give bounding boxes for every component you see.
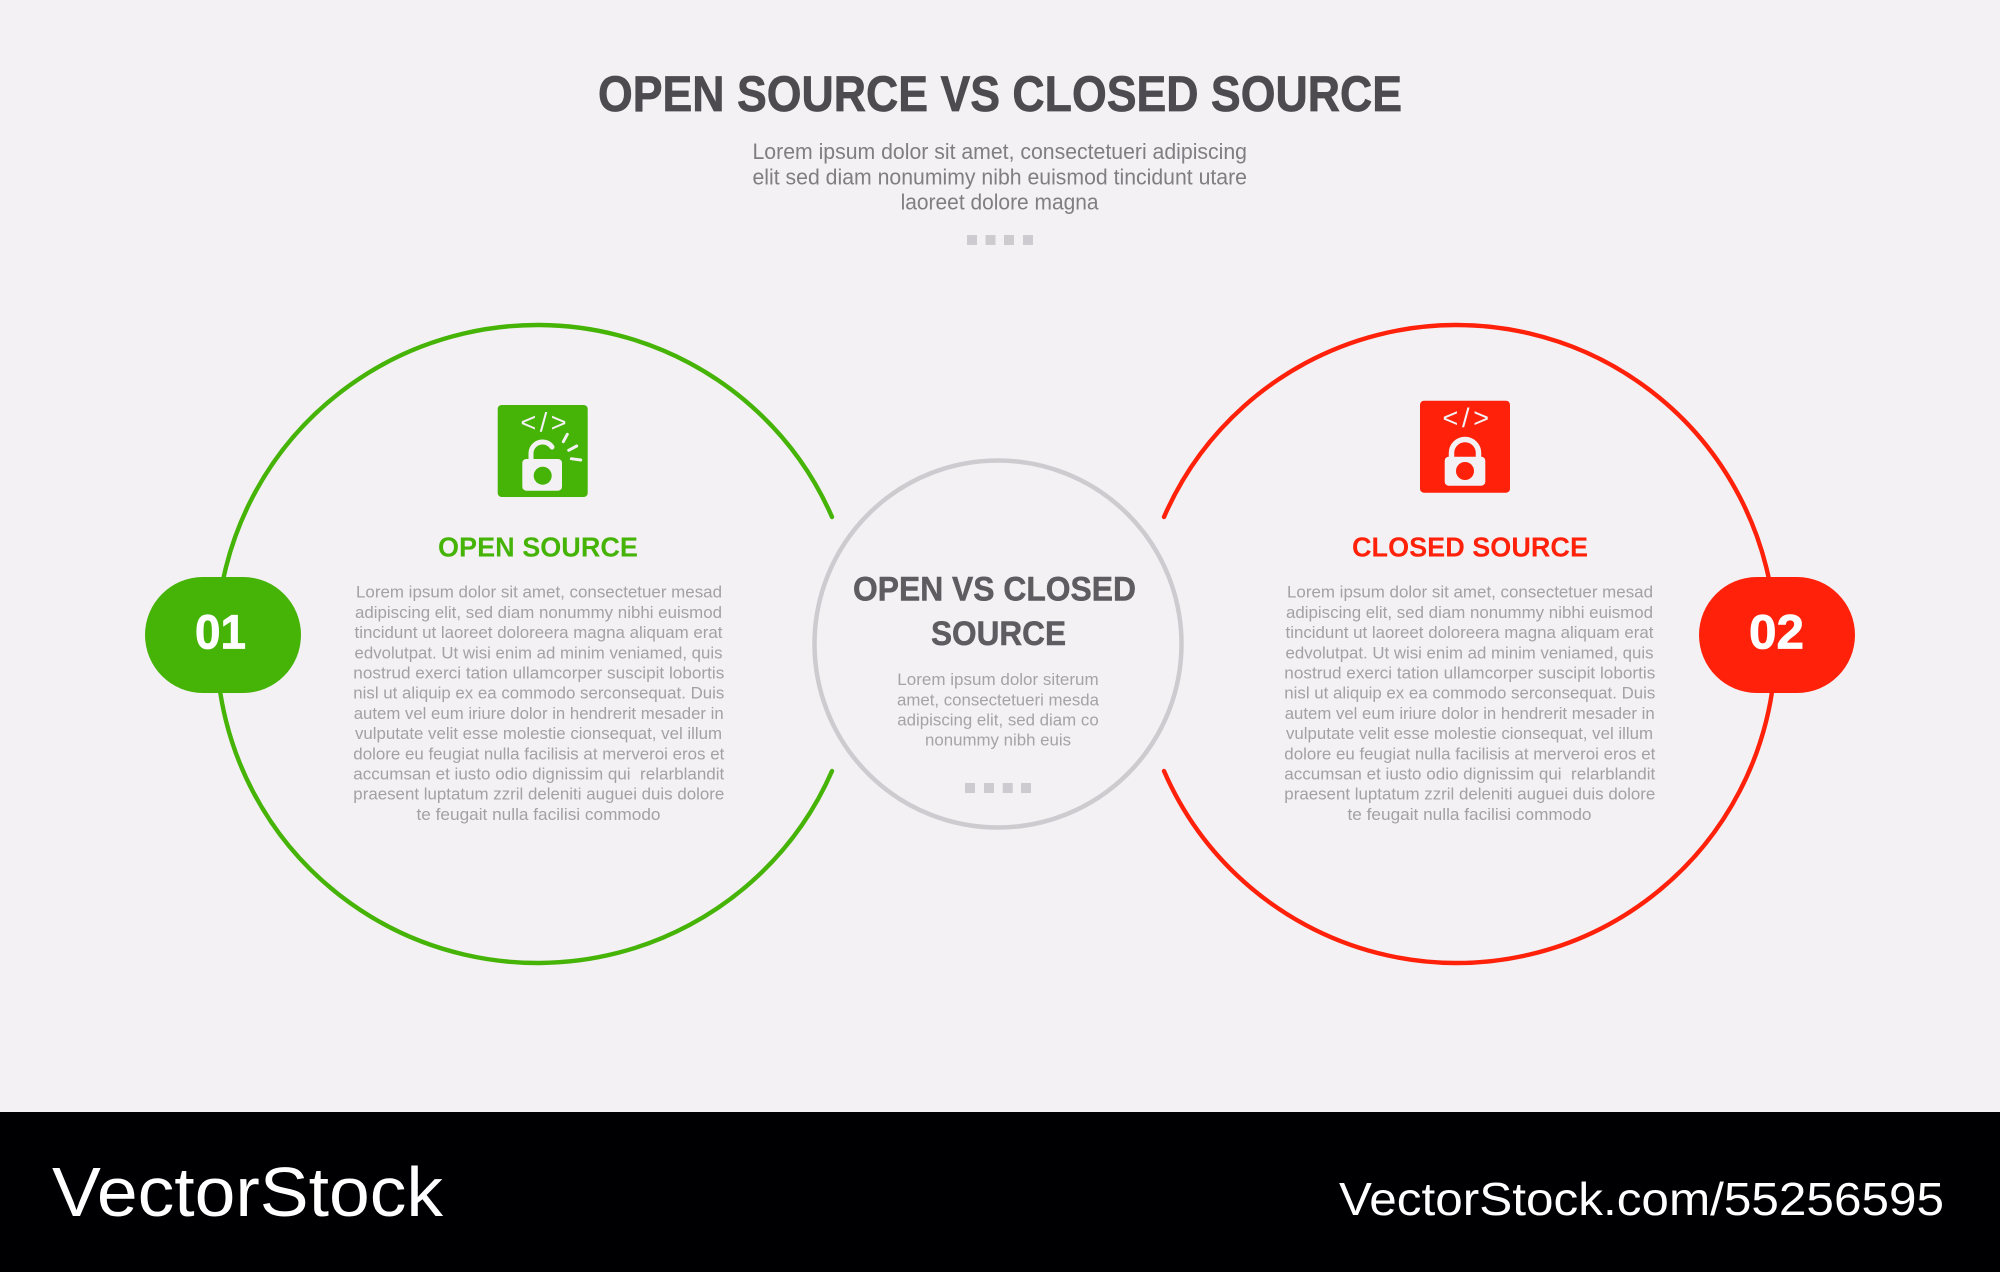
center heading: SOURCE	[931, 615, 1066, 653]
subtitle text block: laoreet dolore magna	[901, 190, 1099, 214]
closed source body text: te feugait nulla facilisi commodo	[1348, 805, 1592, 824]
icon: code with closed padlock: </>	[1442, 403, 1489, 433]
open source body text: dolore eu feugiat nulla facilisis at merveroi eros et	[353, 744, 725, 763]
panel: center comparison	[814, 460, 1182, 828]
closed source heading: CLOSED SOURCE	[1352, 532, 1588, 562]
open source body text: vulputate velit esse molestie cionsequat, vel illum	[355, 724, 722, 743]
closed source body text: praesent luptatum zzril deleniti auguei duis dolore	[1284, 785, 1655, 804]
panel: open source	[145, 325, 832, 963]
subtitle text block: Lorem ipsum dolor sit amet, consectetueri adipiscing	[752, 139, 1247, 164]
center heading: OPEN VS CLOSED	[853, 570, 1136, 608]
open source body text: edvolutpat. Ut wisi enim ad minim veniamed, quis	[354, 643, 722, 662]
panel: closed source	[1164, 325, 1855, 963]
open source body text: Lorem ipsum dolor sit amet, consectetuer mesad	[356, 583, 722, 602]
center body text: adipiscing elit, sed diam co	[897, 711, 1099, 730]
title: OPEN SOURCE VS CLOSED SOURCE	[598, 66, 1402, 122]
open source circle outline	[217, 325, 832, 963]
open source body text: nostrud exerci tation ullamcorper suscipit lobortis	[353, 664, 724, 682]
center heading	[853, 570, 1136, 653]
closed source body text: edvolutpat. Ut wisi enim ad minim veniamed, quis	[1286, 643, 1654, 662]
center body text	[897, 670, 1100, 750]
closed source body text: autem vel eum iriure dolor in hendrerit mesader in	[1285, 704, 1655, 723]
icon: code with open padlock: </>	[520, 408, 566, 438]
title dots	[967, 235, 1033, 245]
open source heading: OPEN SOURCE	[438, 532, 638, 562]
open source body text	[353, 583, 725, 824]
center body text: Lorem ipsum dolor siterum	[897, 670, 1099, 689]
closed source body text: dolore eu feugiat nulla facilisis at merveroi eros et	[1284, 744, 1656, 763]
open source body text: te feugait nulla facilisi commodo	[416, 805, 660, 824]
footer url: VectorStock.com/55256595	[1339, 1173, 1944, 1225]
badge 02: 02	[1749, 606, 1804, 660]
open source body text: praesent luptatum zzril deleniti auguei duis dolore	[353, 785, 724, 804]
closed source body text: accumsan et iusto odio dignissim qui relarblandit	[1284, 764, 1656, 784]
subtitle text block: elit sed diam nonumimy nibh euismod tincidunt utare	[752, 164, 1247, 190]
badge 01: 01	[195, 606, 246, 660]
open source body text: nisl ut aliquip ex ea commodo serconsequat. Duis	[353, 684, 724, 703]
subtitle text block	[752, 139, 1247, 214]
badge 02	[1699, 577, 1855, 693]
icon: code with closed padlock	[1420, 401, 1510, 493]
footer bar	[0, 1112, 2000, 1272]
center body text: amet, consectetueri mesda	[897, 691, 1100, 710]
closed source body text: Lorem ipsum dolor sit amet, consectetuer mesad	[1287, 583, 1653, 602]
closed source body text: tincidunt ut laoreet doloreera magna aliquam erat	[1286, 623, 1654, 642]
closed source body text: vulputate velit esse molestie cionsequat, vel illum	[1286, 724, 1653, 743]
closed source body text: nostrud exerci tation ullamcorper suscipit lobortis	[1284, 664, 1655, 682]
footer logo: VectorStock	[52, 1153, 444, 1231]
icon: code with open padlock	[498, 405, 588, 497]
closed source body text: adipiscing elit, sed diam nonummy nibhi euismod	[1286, 603, 1653, 622]
center dots	[965, 783, 1031, 793]
badge 01	[145, 577, 301, 693]
closed source body text	[1284, 583, 1656, 824]
center circle outline	[814, 460, 1182, 828]
open source body text: tincidunt ut laoreet doloreera magna aliquam erat	[354, 623, 723, 642]
center body text: nonummy nibh euis	[925, 731, 1071, 750]
closed source circle outline	[1164, 325, 1776, 963]
closed source body text: nisl ut aliquip ex ea commodo serconsequat. Duis	[1284, 684, 1655, 703]
open source body text: adipiscing elit, sed diam nonummy nibhi euismod	[355, 603, 722, 622]
open source body text: autem vel eum iriure dolor in hendrerit mesader in	[354, 704, 724, 723]
open source body text: accumsan et iusto odio dignissim qui relarblandit	[353, 764, 725, 784]
